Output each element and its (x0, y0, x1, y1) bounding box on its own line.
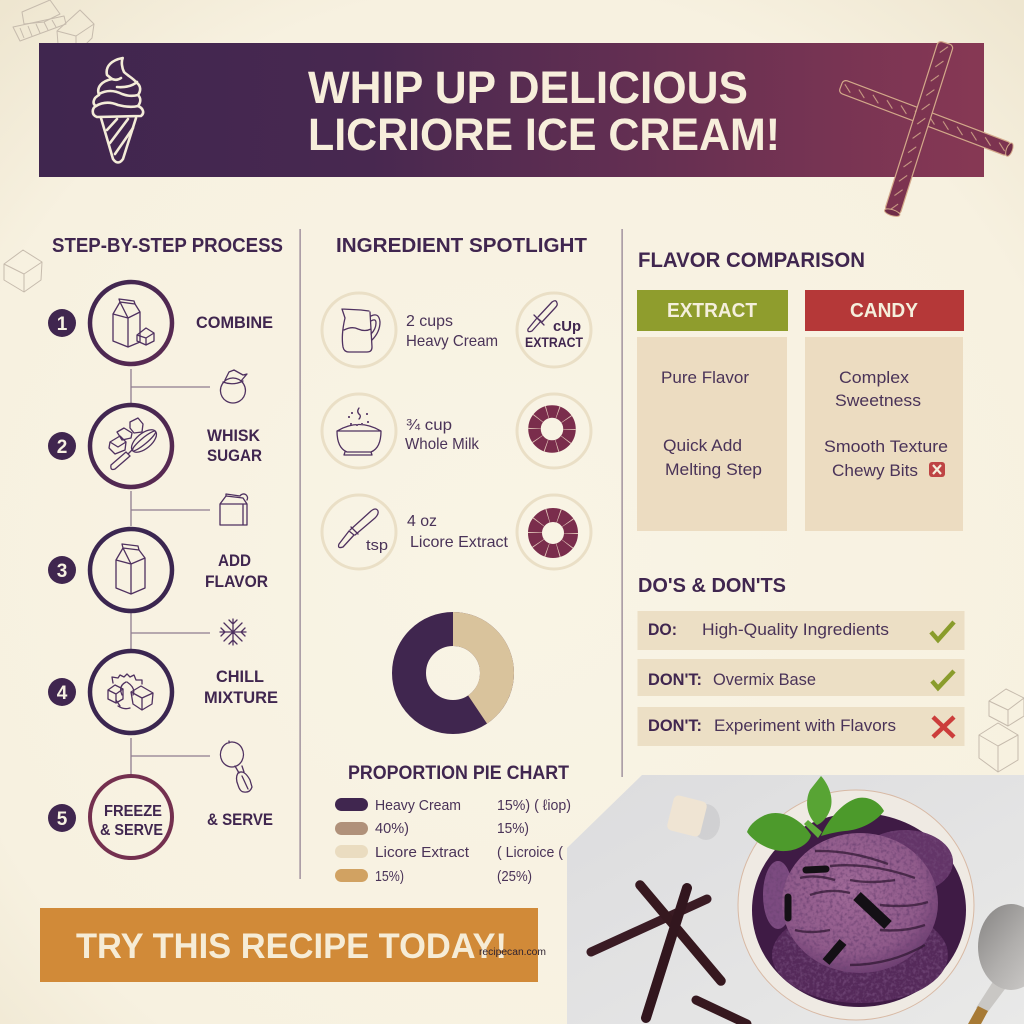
row: don't experiment: DON'T: (648, 716, 702, 735)
panel: step-by-step process (48, 235, 283, 858)
title: LICRIORE ICE CREAM! (308, 109, 780, 160)
panel: ingredient spotlight (322, 235, 591, 885)
ingredient: licorice ring (517, 495, 591, 569)
heading: step-by-step: STEP-BY-STEP PROCESS (52, 235, 283, 257)
row: do: High-Quality Ingredients (702, 620, 889, 639)
ingredient row: licorice extract: 4 oz (407, 513, 437, 530)
column: extract: Pure Flavor (661, 368, 749, 387)
icon: sugar box (220, 494, 248, 525)
heading: do's and don'ts: DO'S & DON'TS (638, 575, 786, 597)
column: candy: CANDY (850, 300, 919, 322)
column: extract: Melting Step (665, 460, 762, 479)
call to action banner (40, 908, 538, 982)
step 5: 5 (57, 809, 68, 830)
chart legend: 15%) (497, 820, 529, 837)
chart legend: ( Licroice ( (497, 844, 563, 861)
step 1 (48, 282, 273, 364)
step 3 (48, 529, 268, 611)
header banner (39, 41, 1015, 218)
bowl (738, 790, 974, 1020)
column: candy (805, 290, 964, 531)
ingredient row: whole milk: ¾ cup (406, 417, 452, 434)
chart legend (335, 797, 571, 885)
icon: crossed licorice sticks (839, 41, 1015, 218)
ingredient row: whole milk: Whole Milk (405, 436, 480, 453)
ingredient: cup extract (517, 293, 591, 367)
decorative sugar cubes, right (979, 689, 1024, 772)
column divider 1 (300, 229, 301, 879)
row: don't overmix (638, 659, 964, 696)
ingredient: cup extract: cUp (553, 318, 581, 335)
column: candy: Sweetness (835, 391, 921, 410)
row: do (638, 611, 964, 650)
row: don't overmix: DON'T: (648, 670, 702, 689)
ingredient row: heavy cream: Heavy Cream (406, 333, 498, 350)
step 3: ADD (218, 551, 251, 570)
column: candy: Smooth Texture (824, 437, 948, 456)
step 4: 4 (57, 683, 68, 704)
sugar cube (666, 794, 720, 840)
column: extract: EXTRACT (667, 300, 757, 322)
row: don't experiment (638, 707, 964, 746)
step 2: SUGAR (207, 446, 262, 465)
row: do: DO: (648, 620, 677, 639)
heading: ingredient spotlight: INGREDIENT SPOTLIGHT (336, 235, 587, 257)
step 4 (48, 651, 278, 733)
watermark: recipecan.com (479, 947, 546, 958)
licorice sticks (591, 885, 747, 1024)
step 2: 2 (57, 437, 67, 458)
call to action banner: TRY THIS RECIPE TODAY! (76, 927, 507, 966)
ice cream scoop (763, 830, 953, 1003)
mint leaves (747, 776, 884, 851)
ingredient row: heavy cream: 2 cups (406, 313, 453, 330)
row: don't overmix: Overmix Base (713, 670, 816, 689)
chart legend: Licore Extract (375, 844, 470, 861)
icon: ice cream scoop (220, 741, 252, 792)
ingredient row: whole milk (322, 394, 480, 468)
step 5: & SERVE (100, 822, 163, 839)
step 2: WHISK (207, 426, 261, 445)
ingredient: cup extract: EXTRACT (525, 334, 583, 350)
ingredient row: licorice extract: Licore Extract (410, 534, 509, 551)
column: extract: Quick Add (663, 436, 742, 455)
chart legend: (25%) (497, 868, 532, 885)
timeline connectors (131, 369, 210, 775)
column: candy: Chewy Bits (832, 461, 918, 480)
heading: flavor comparison: FLAVOR COMPARISON (638, 249, 865, 272)
ingredient: licorice ring (517, 394, 591, 468)
panel: flavor comparison (637, 249, 964, 531)
step 1: COMBINE (196, 313, 273, 332)
icon: snowflake (220, 619, 246, 645)
step 5: & SERVE (207, 810, 273, 829)
ingredient row: heavy cream (322, 293, 498, 367)
spoon (968, 904, 1024, 1024)
column divider 2 (622, 229, 623, 777)
step 4: CHILL (216, 667, 264, 686)
decorative sugar cubes, top left (13, 0, 94, 54)
chart legend: 15%) (375, 868, 404, 885)
step 5: FREEZE (104, 803, 162, 820)
decorative sugar cube, left (4, 250, 42, 292)
step 3: 3 (57, 561, 67, 582)
step 5 (48, 776, 273, 858)
donut chart (409, 629, 497, 717)
ingredient row: licorice extract: tsp (366, 537, 388, 554)
chart legend: 15%) ( ℓiop) (497, 797, 571, 814)
step 4: MIXTURE (204, 688, 278, 707)
icon: sugar bowl (220, 370, 247, 403)
icon: small x (929, 462, 945, 477)
photo: bowl of licorice ice cream (567, 775, 1024, 1024)
step 2 (48, 405, 262, 487)
chart legend: 40%) (375, 820, 409, 837)
ingredient row: licorice extract (322, 495, 509, 569)
icon: ice cream cone (93, 58, 143, 162)
panel: do's and don'ts (638, 575, 964, 746)
step 1: 1 (57, 314, 68, 335)
step 3: FLAVOR (205, 572, 268, 591)
column: candy: Complex (839, 368, 910, 387)
title (308, 62, 780, 160)
column: extract (637, 290, 788, 531)
row: don't experiment: Experiment with Flavors (714, 716, 896, 735)
chart legend: Heavy Cream (375, 797, 461, 814)
title: WHIP UP DELICIOUS (308, 62, 748, 113)
heading: proportion pie chart: PROPORTION PIE CHART (348, 763, 569, 784)
